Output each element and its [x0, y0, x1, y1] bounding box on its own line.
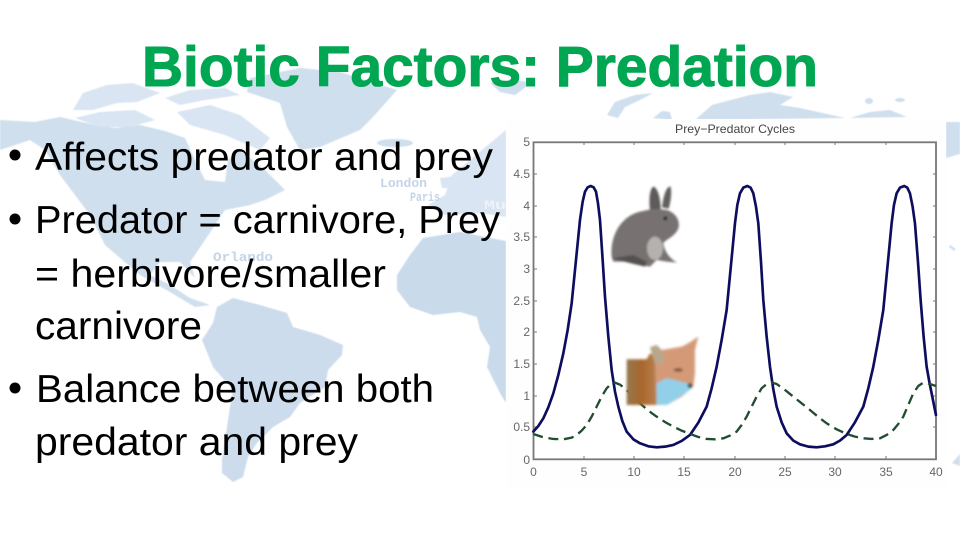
y axis labels: 5 — [523, 135, 530, 149]
bullet: balance: Balance between both — [36, 368, 434, 411]
y axis labels: 1.5 — [513, 357, 530, 371]
y axis labels: 1 — [523, 389, 530, 403]
x axis labels: 35 — [879, 465, 893, 479]
faint map city labels: Paris — [410, 190, 440, 205]
panel: prey-predator chart — [506, 119, 946, 490]
Europe — [428, 130, 506, 217]
North America — [0, 117, 285, 307]
y axis labels — [513, 135, 530, 467]
bullet: predator and prey definitions — [10, 199, 501, 348]
background world map — [0, 68, 960, 482]
x axis labels: 15 — [677, 465, 691, 479]
Arctic islands — [73, 83, 270, 150]
prey curve (solid blue) — [533, 186, 936, 447]
icon: rabbit — [611, 187, 679, 267]
x axis labels: 40 — [929, 465, 943, 479]
icon: fox head — [627, 337, 698, 405]
Greenland — [247, 68, 397, 150]
x axis labels: 5 — [581, 465, 588, 479]
bullet: balance — [10, 368, 434, 464]
bullet: predator and prey definitions: Predator = carnivore, Prey — [35, 199, 501, 242]
y axis labels: 0.5 — [513, 420, 530, 434]
bullet: affects: Affects predator and prey — [35, 136, 494, 179]
bullet: predator and prey definitions: = herbivore/smaller — [35, 253, 386, 296]
Arctic Russia — [490, 80, 907, 120]
x axis labels: 10 — [627, 465, 641, 479]
faint map city labels: London — [380, 176, 427, 191]
x axis labels: 0 — [530, 465, 537, 479]
y axis labels: 2.5 — [513, 294, 530, 308]
y axis labels: 3 — [523, 262, 530, 276]
Africa — [397, 232, 506, 403]
chart axes frame — [534, 142, 936, 459]
y axis labels: 2 — [523, 325, 530, 339]
faint map city labels: Mu — [484, 198, 506, 213]
y axis labels: 4.5 — [513, 167, 530, 181]
faint map city labels — [213, 176, 506, 265]
Iceland — [377, 139, 413, 147]
x axis labels: 30 — [828, 465, 842, 479]
y axis labels: 0 — [523, 453, 530, 467]
title: Biotic Factors: Predation — [142, 35, 818, 99]
bullet: balance: predator and prey — [35, 421, 359, 464]
x axis labels — [530, 465, 943, 479]
faint map city labels: Orlando — [213, 250, 273, 265]
y axis labels: 4 — [523, 199, 530, 213]
predator curve (dashed green) — [533, 383, 936, 439]
bullet: predator and prey definitions: carnivore — [35, 305, 202, 348]
bullet list — [10, 136, 501, 464]
Right edge land — [946, 122, 960, 158]
South America — [202, 298, 343, 482]
x axis labels: 25 — [778, 465, 792, 479]
chart title: Prey−Predator Cycles — [675, 122, 795, 136]
y axis labels: 3.5 — [513, 230, 530, 244]
x axis labels: 20 — [728, 465, 742, 479]
